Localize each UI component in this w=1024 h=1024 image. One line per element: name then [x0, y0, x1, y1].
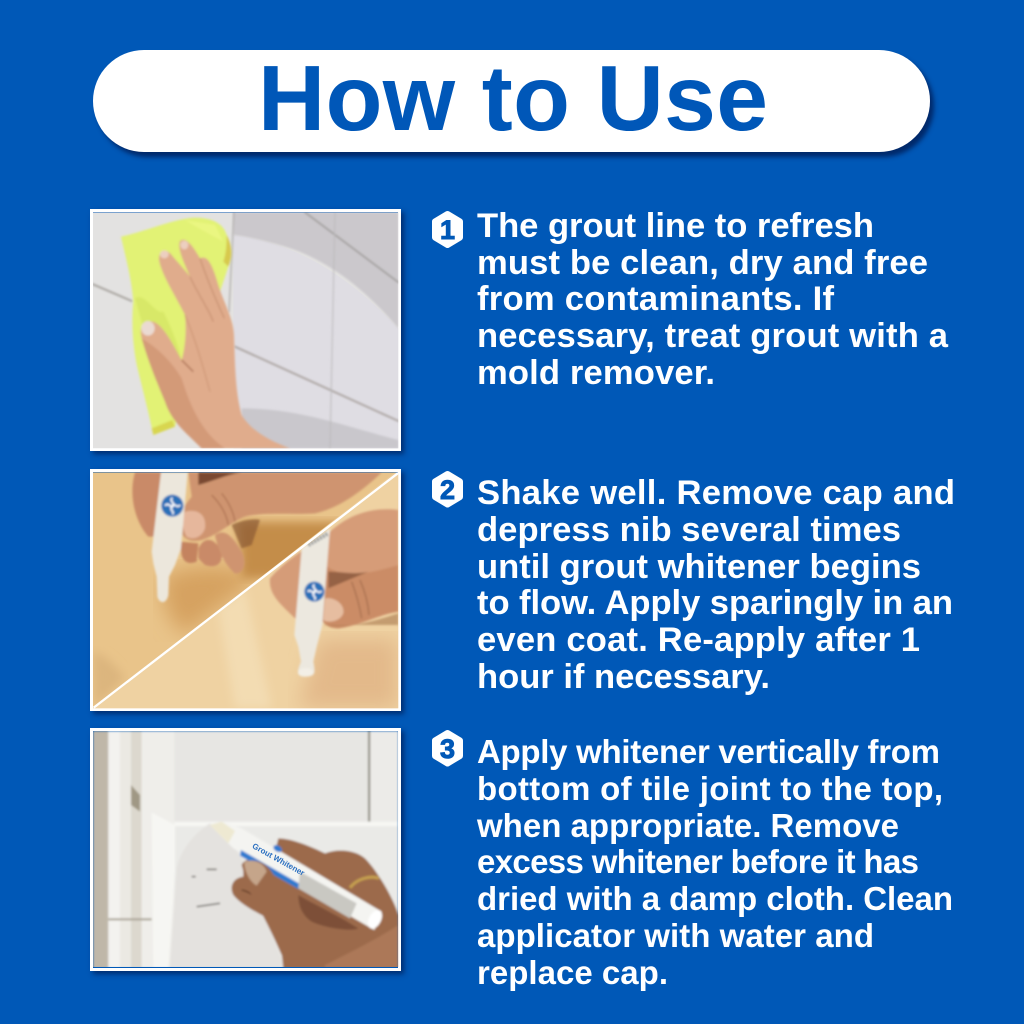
- step 1 text: from contaminants. If: [477, 280, 834, 318]
- photo frame: wiping tile: [90, 209, 401, 451]
- step 3 text: when appropriate. Remove: [476, 807, 899, 844]
- step 3 text: [476, 733, 953, 991]
- GE logo: [304, 582, 324, 602]
- step 3 text: replace cap.: [477, 954, 668, 991]
- hand: [141, 240, 290, 448]
- ring: [350, 877, 379, 888]
- icon: step 3 badge: 3: [440, 734, 455, 764]
- pen: [152, 472, 188, 602]
- step 2 text: to flow. Apply sparingly in an: [477, 584, 953, 622]
- step 2 text: even coat. Re-apply after 1: [477, 621, 920, 659]
- step 3 text: bottom of tile joint to the top,: [477, 770, 943, 807]
- step 2 text: depress nib several times: [477, 511, 901, 549]
- photo: hand applying whitener pen to tile joint: [93, 731, 398, 967]
- icon: step 1 badge: 1: [440, 215, 455, 245]
- pen: [228, 828, 383, 932]
- thumb and nail: [242, 860, 284, 955]
- icon: step 2 badge: [435, 474, 460, 505]
- title banner: [93, 50, 930, 152]
- photo frame: shaking and priming pen: [90, 469, 401, 711]
- icon: step 2 badge: 2: [440, 475, 455, 505]
- step 2 text: Shake well. Remove cap and: [477, 474, 955, 512]
- hand: [232, 838, 398, 968]
- step 2 text: hour if necessary.: [477, 658, 770, 696]
- pen label: Grout Whitener: [251, 842, 306, 878]
- step 3 text: excess whitener before it has: [477, 843, 919, 880]
- step 2 text: [477, 474, 955, 696]
- upper hand: [132, 472, 165, 537]
- step 3 text: dried with a damp cloth. Clean: [477, 880, 953, 917]
- step 1 text: The grout line to refresh: [477, 207, 874, 245]
- step 3 text: applicator with water and: [477, 917, 874, 954]
- lower hand: [326, 508, 398, 620]
- icon: step 1 badge: [435, 214, 460, 245]
- photo: hand wiping tile with yellow cloth: [93, 212, 398, 448]
- photo: pen being primed on wood, split diagonally: [93, 472, 398, 708]
- step 1 text: [477, 207, 949, 392]
- pen: [294, 528, 330, 677]
- step 1 text: mold remover.: [477, 354, 715, 392]
- icon: step 3 badge: [435, 733, 460, 764]
- yellow cloth: [121, 218, 231, 435]
- step 3 text: Apply whitener vertically from: [477, 733, 940, 770]
- title: How to Use: [258, 46, 768, 150]
- step 1 text: must be clean, dry and free: [477, 244, 928, 282]
- whitened grout area: [170, 823, 285, 968]
- GE logo: [161, 495, 183, 517]
- step 2 text: until grout whitener begins: [477, 548, 921, 586]
- step 1 text: necessary, treat grout with a: [477, 317, 949, 355]
- photo frame: applying whitener: [90, 728, 401, 971]
